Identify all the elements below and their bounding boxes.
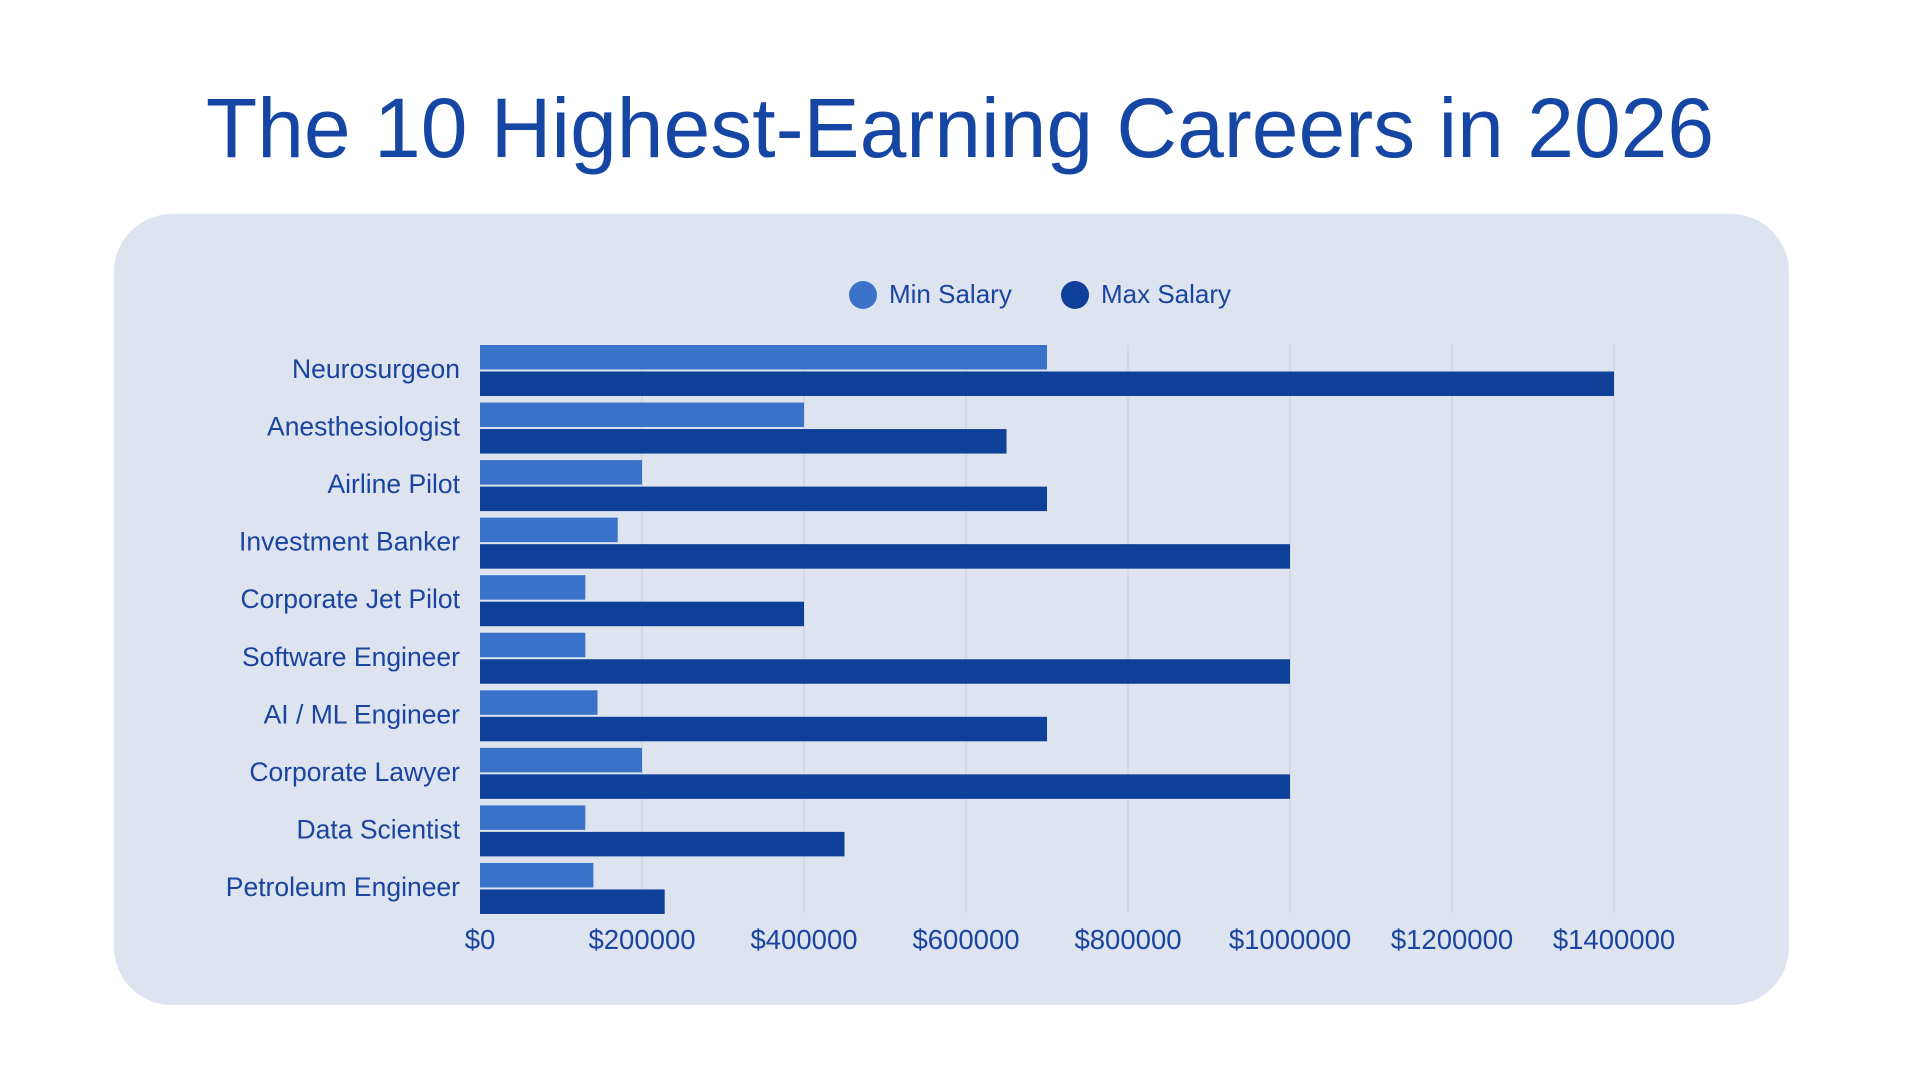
x axis labels: $200000 xyxy=(588,924,696,955)
panel: chart card xyxy=(114,214,1789,1005)
category labels: Software Engineer xyxy=(242,642,460,672)
x axis labels: $1200000 xyxy=(1391,924,1513,955)
legend: Max Salary xyxy=(1101,279,1231,309)
category labels xyxy=(226,354,461,902)
legend xyxy=(849,279,1231,309)
x axis labels: $0 xyxy=(465,924,495,955)
x axis labels: $400000 xyxy=(750,924,858,955)
bar chart xyxy=(480,345,1614,914)
category labels: Petroleum Engineer xyxy=(226,872,460,902)
category labels: Neurosurgeon xyxy=(292,354,460,384)
x axis labels xyxy=(465,924,1675,955)
category labels: Anesthesiologist xyxy=(267,412,461,442)
category labels: Corporate Lawyer xyxy=(249,757,460,787)
category labels: Corporate Jet Pilot xyxy=(241,584,461,614)
title: The 10 Highest-Earning Careers in 2026 xyxy=(206,81,1714,175)
x axis labels: $600000 xyxy=(912,924,1020,955)
category labels: Data Scientist xyxy=(296,814,461,844)
x axis labels: $800000 xyxy=(1074,924,1182,955)
x axis labels: $1400000 xyxy=(1553,924,1675,955)
x axis labels: $1000000 xyxy=(1229,924,1351,955)
category labels: Investment Banker xyxy=(239,527,460,557)
category labels: AI / ML Engineer xyxy=(264,699,460,729)
legend: Min Salary xyxy=(889,279,1012,309)
category labels: Airline Pilot xyxy=(327,469,461,499)
